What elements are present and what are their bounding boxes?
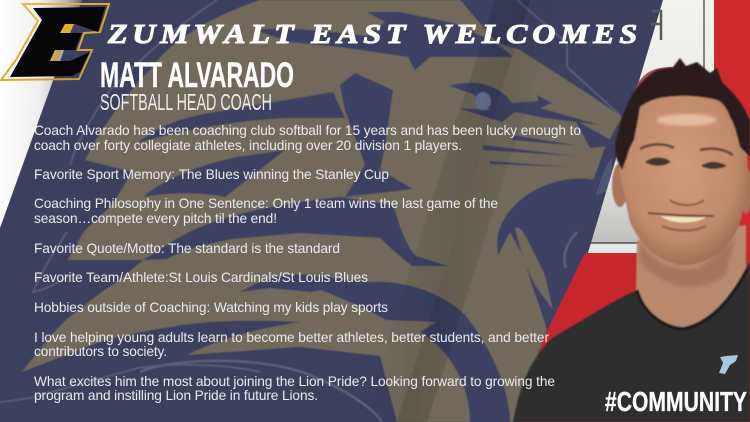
paragraph: quote: Favorite Quote/Motto: The standard is the standard [34, 241, 340, 256]
smile line [648, 213, 714, 216]
body text [34, 123, 581, 403]
white wedge top left [0, 0, 82, 228]
coach name: MATT ALVARADO [100, 56, 294, 95]
teeth [660, 216, 706, 222]
lion head tan area [22, 0, 622, 422]
title: ZUMWALT EAST WELCOMES [107, 19, 642, 49]
navy swirl [300, 282, 510, 422]
navy stripe upper mane [137, 92, 345, 143]
paragraph: sport memory: Favorite Sport Memory: The Blues winning the Stanley Cup [34, 167, 389, 182]
coach role: SOFTBALL HEAD COACH [100, 89, 272, 115]
shirt logo [719, 355, 738, 374]
neck [636, 225, 746, 327]
fold shadow right [397, 0, 560, 422]
paragraph: philosophy: Coaching Philosophy in One Sentence: Only 1 team wins the last game of the [34, 196, 498, 211]
paragraph: background: Coach Alvarado has been coaching club softball for 15 years and has been lucky enough to [34, 123, 581, 138]
logo gray insets [52, 50, 64, 61]
paragraph: background: coach over forty collegiate athletes, including over 20 division 1 players. [34, 138, 462, 153]
right brow [700, 149, 733, 155]
white wall [588, 0, 750, 253]
paragraph: team: Favorite Team/Athlete:St Louis Cardinals/St Louis Blues [34, 270, 368, 285]
paragraph: hobbies: Hobbies outside of Coaching: Watching my kids play sports [34, 300, 388, 315]
lion eye iris [475, 92, 491, 110]
navy wedge in lower mane [240, 274, 370, 292]
right ear [740, 166, 750, 214]
neck shadow [640, 238, 735, 287]
paragraph: excitement: program and instilling Lion Pride in future Lions. [34, 388, 318, 403]
left brow [640, 144, 674, 149]
fold shadow left [362, 0, 530, 422]
red wall upper [714, 0, 750, 253]
paragraph: philosophy: season…compete every pitch til the end! [34, 211, 277, 226]
face [620, 91, 747, 265]
navy mid band [143, 197, 448, 266]
lower outline arc [140, 232, 577, 422]
school E logo [1, 4, 109, 80]
navy mane patch [340, 73, 413, 197]
navy muzzle loop [497, 178, 603, 345]
paragraph: excitement: What excites him the most about joining the Lion Pride? Looking forward to growing the [34, 374, 555, 389]
right eye [701, 162, 727, 169]
outline arcs [0, 0, 620, 402]
forehead shine [657, 114, 717, 126]
red wall lower [514, 253, 750, 422]
lion eye [449, 83, 600, 125]
paragraph: mission: contributors to society. [34, 344, 167, 359]
lower lip [662, 226, 706, 230]
navy top band [460, 0, 533, 50]
dark letters on wall [651, 10, 662, 40]
navy stripe lower mane [143, 150, 285, 197]
red script sign [633, 67, 672, 100]
nose [668, 167, 705, 203]
white wall lower stripe [588, 243, 640, 253]
whisker lines [483, 120, 620, 167]
left eye [645, 158, 671, 166]
shirt [513, 262, 750, 422]
shirt collar [637, 268, 748, 329]
photo background [514, 0, 750, 422]
logo gold insets [50, 24, 74, 61]
hair [615, 58, 750, 170]
wall dark trim [591, 0, 704, 243]
paragraph: mission: I love helping young adults learn to become better athletes, better students, and better [34, 330, 549, 345]
nose shadow [670, 200, 704, 205]
logo gold outline [1, 4, 109, 80]
tan tongue [505, 227, 553, 310]
left ear [612, 163, 628, 207]
navy brow [255, 12, 513, 70]
coach photo [513, 58, 750, 422]
dark script on wall [596, 158, 612, 195]
logo black letter [10, 7, 105, 77]
